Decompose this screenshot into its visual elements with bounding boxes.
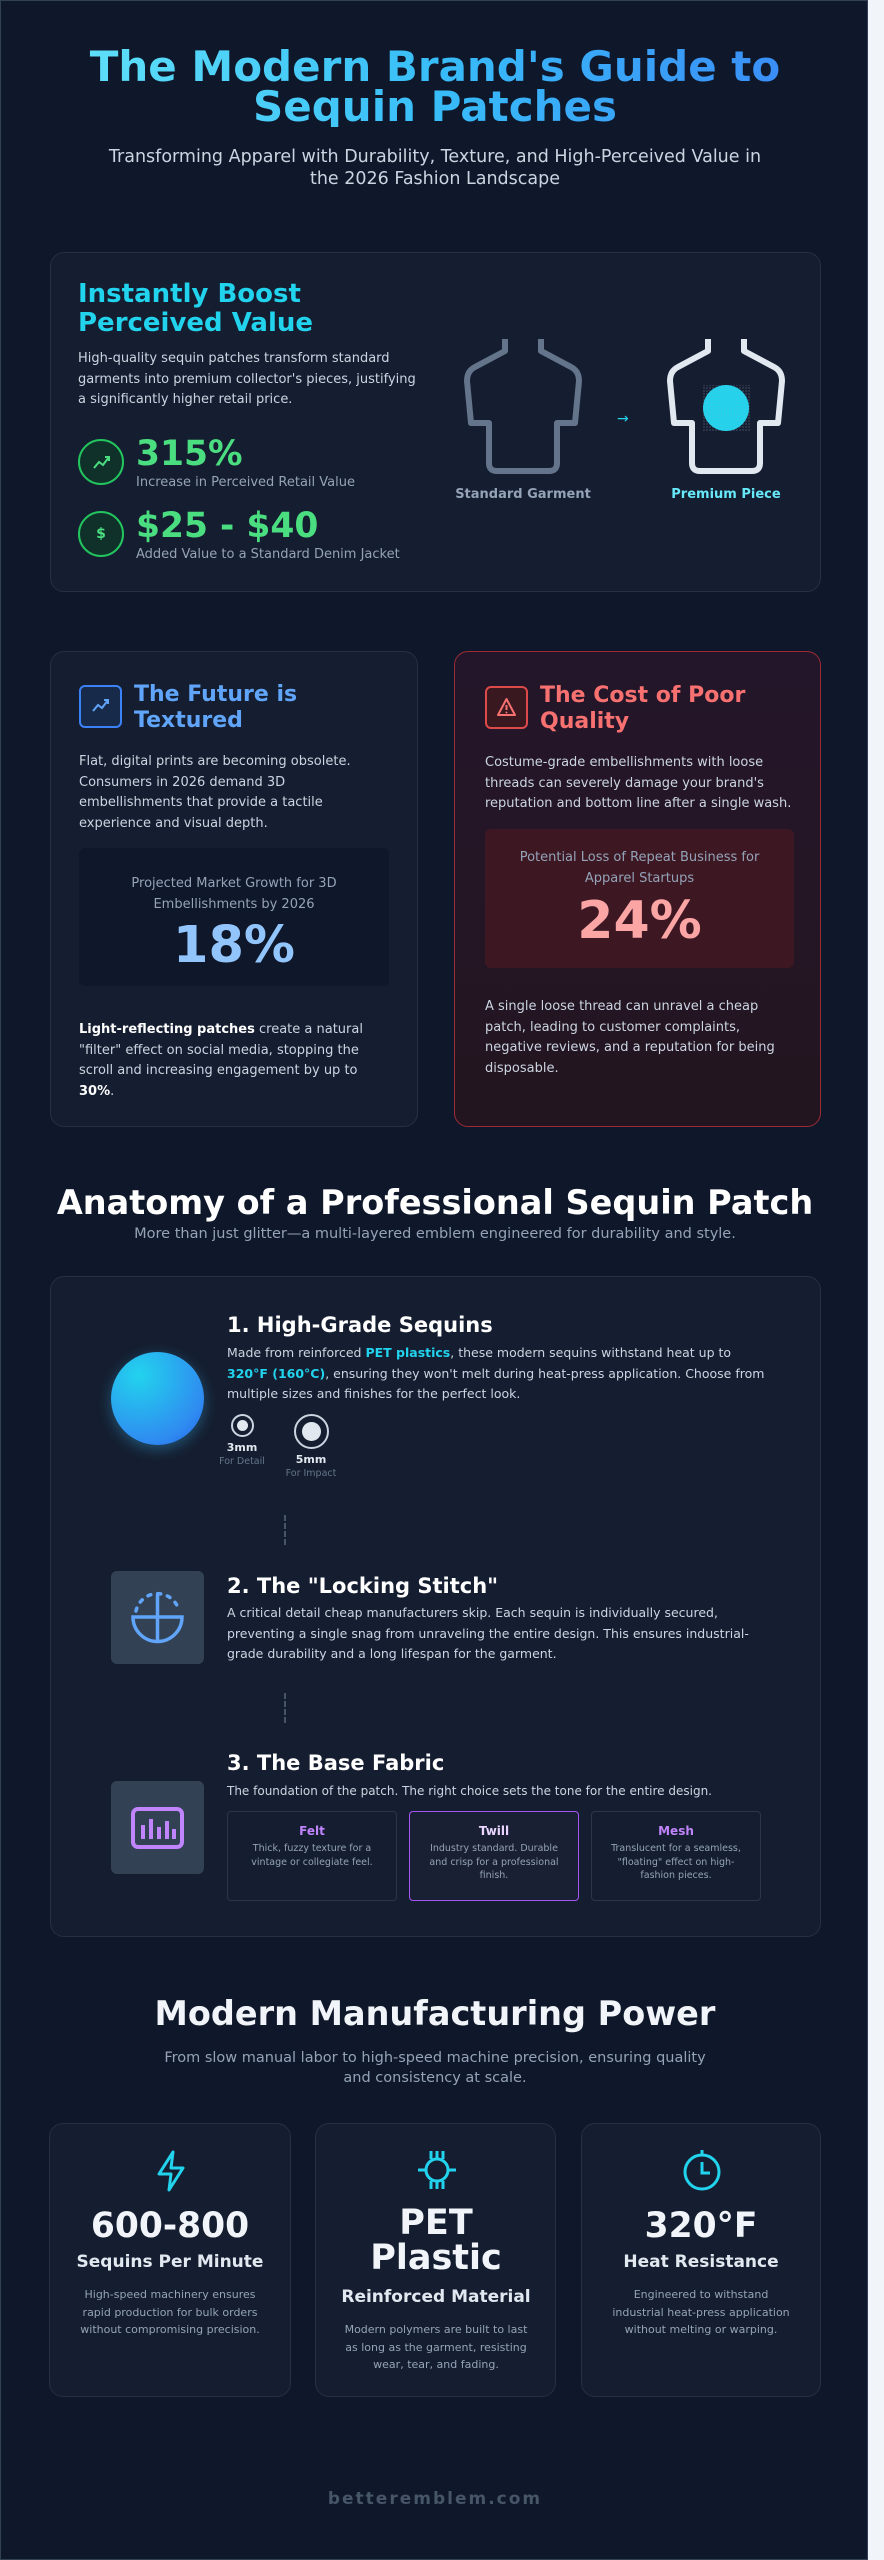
number: Plastic [370,2238,502,2278]
stat box: 24%: Potential Loss of Repeat Business for Apparel Startups [520,850,759,886]
fabric card: mesh: Translucent for a seamless, "floating" effect on high-fashion pieces. [611,1843,741,1881]
stat box: 18% [79,848,389,986]
sequin size: 5mm: 5mm [296,1453,326,1466]
sequin size: 3mm: For Detail [219,1456,265,1467]
number: 600-800 [91,2206,249,2246]
stat: $25-$40 [78,506,400,562]
subtitle: anatomy: More than just glitter—a multi-layered emblem engineered for durability and style. [134,1226,736,1242]
arrow: → [617,411,629,427]
item 1: sequins [104,1313,764,1479]
icon: sequin circle [111,1352,204,1445]
stat: 315% [78,434,355,490]
number: 320°F [645,2206,757,2246]
heading: Perceived Value [78,308,313,338]
panel: anatomy [50,1276,821,1937]
description: Flat, digital prints are becoming obsolete. Consumers in 2026 demand 3D embellishments that provide a tactile experience and visual depth. [79,754,351,830]
sequin size: 3mm: 3mm [227,1441,257,1454]
heading: anatomy: Anatomy of a Professional Sequin Patch [57,1183,813,1222]
heading: Quality [540,709,629,734]
fabric card: twill [409,1811,579,1901]
icon: stitch [111,1571,204,1664]
panel: cost of poor quality [454,651,821,1127]
stat: 315%: Increase in Perceived Retail Value [136,475,355,490]
icon: timer [684,2150,720,2190]
text: light reflecting: Light-reflecting patches create a natural "filter" effect on social media, stopping the scroll and increasing engagement by up to 30%. [79,1022,363,1098]
number [370,2203,502,2278]
fabric card: felt: Felt [299,1824,325,1838]
icon: dollar [78,511,124,557]
heading: The Cost of Poor [540,683,745,708]
footer: betteremblem.com [328,2489,542,2509]
description: Costume-grade embellishments with loose threads can severely damage your brand's reputation and bottom line after a single wash. [485,755,791,811]
fabric card: mesh: Mesh [658,1824,694,1838]
description: High-speed machinery ensures rapid production for bulk orders without compromising precision. [80,2288,260,2336]
fabric card: mesh [591,1811,761,1901]
label: standard garment: Standard Garment [455,487,591,502]
item 3: base fabric [111,1751,761,1901]
icon: warning [485,686,528,729]
icon: premium piece [667,339,785,474]
stat box: 18%: Projected Market Growth for 3D Embellishments by 2026 [131,876,337,912]
sequin size: 5mm [286,1414,336,1479]
heading [540,683,746,734]
icon: fabric [111,1781,204,1874]
fabric card: felt: Thick, fuzzy texture for a vintage or collegiate feel. [251,1843,373,1868]
card: speed [49,2123,291,2397]
sequin size: 3mm [219,1414,265,1467]
stat box: 18%: 18% [173,916,295,975]
number: PET [399,2203,473,2243]
heading: 3. The Base Fabric [227,1751,444,1775]
stat: $25-$40: $25 - $40 [136,506,318,546]
sequin size: 5mm: For Impact [286,1468,336,1479]
card: heat [581,2123,821,2397]
heading: manufacturing: Modern Manufacturing Power [155,1994,715,2033]
label: Heat Resistance [623,2252,779,2272]
description: Modern polymers are built to last as long as the garment, resisting wear, tear, and fading. [345,2323,527,2371]
heading [78,279,313,338]
card: material [315,2123,556,2397]
heading: Instantly Boost [78,279,301,309]
panel: future is textured [50,651,418,1127]
icon: trend box [79,685,122,728]
heading: 2. The "Locking Stitch" [227,1574,498,1598]
title: Sequin Patches [253,82,617,131]
icon: trend [78,439,124,485]
item 2: locking stitch [111,1571,749,1664]
icon: dollar: $ [96,526,106,542]
description: Engineered to withstand industrial heat-press application without melting or warping. [612,2288,790,2336]
subtitle: manufacturing: From slow manual labor to high-speed machine precision, ensuring quality and consistency at scale. [164,2050,706,2086]
title: The Modern Brand's Guide to [90,42,780,91]
heading [134,682,297,733]
stat: $25-$40: Added Value to a Standard Denim Jacket [136,547,400,562]
label: Sequins Per Minute [77,2252,263,2272]
fabric card: felt [227,1811,397,1901]
heading: 1. High-Grade Sequins [227,1313,493,1337]
stat: 315%: 315% [136,434,243,474]
icon: chip [418,2151,456,2189]
description: High-quality sequin patches transform standard garments into premium collector's pieces, justifying a significantly higher retail price. [78,351,416,407]
heading: Textured [134,708,243,733]
fabric card: twill: Twill [479,1824,509,1838]
icon: lightning [157,2150,185,2192]
panel: perceived value [50,252,821,592]
stat box: 24% [485,829,794,968]
label: premium piece: Premium Piece [671,487,781,502]
title [1,47,869,127]
fabric card: twill: Industry standard. Durable and crisp for a professional finish. [429,1843,559,1881]
icon: standard garment [464,339,582,474]
subtitle: Transforming Apparel with Durability, Texture, and High-Perceived Value in the 2026 Fashion Landscape [109,147,761,189]
stat box: 24%: 24% [577,891,702,951]
body: A critical detail cheap manufacturers skip. Each sequin is individually secured, preventing a single snag from unraveling the entire design. This ensures industrial-grade durability and a long lifespan for the garment. [227,1605,749,1661]
heading: The Future is [134,682,297,707]
body: The foundation of the patch. The right choice sets the tone for the entire design. [227,1784,712,1798]
label: Reinforced Material [341,2287,531,2307]
text: loose thread: A single loose thread can unravel a cheap patch, leading to customer complaints, negative reviews, and a reputation for being disposable. [485,999,775,1076]
body: Made from reinforced PET plastics, these modern sequins withstand heat up to 320°F (160°C), ensuring they won't melt during heat-press application. Choose from multiple sizes and finishes for the perfect look. [227,1345,764,1401]
